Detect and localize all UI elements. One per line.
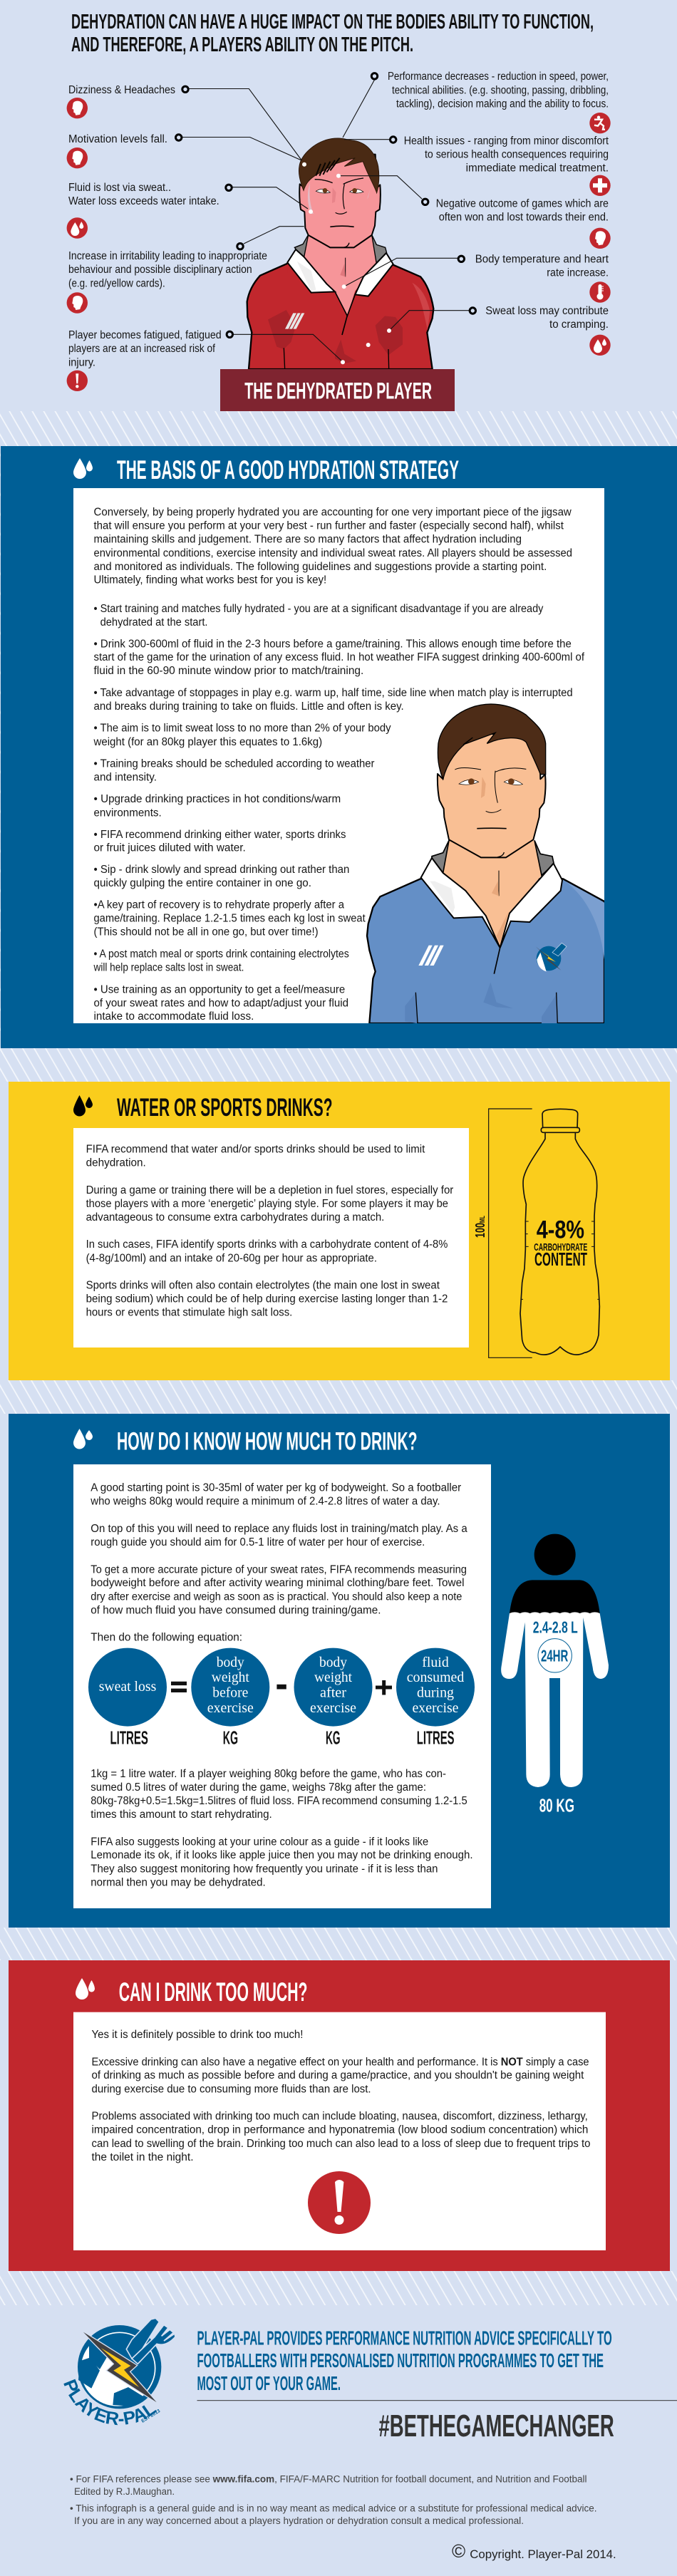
bottle label [534,1216,587,1270]
body text: worked example: normal then you may be dehydrated. [91,1877,266,1889]
heading: CAN I DRINK TOO MUCH? [119,1977,307,2007]
term: body weight after exercise: weight [314,1670,352,1685]
term: sweat loss [88,1648,167,1748]
icon: shirt badge [536,943,567,971]
callout: cramping: to cramping. [549,319,609,331]
white text panel [73,2012,606,2250]
intro text: and monitored as individuals. The following guidelines and suggestions provide a starting point. [94,561,547,573]
figure labels [533,1618,578,1816]
guideline bullets: start of the game for the urination of any excess fluid. In hot weather FIFA suggest drinking 400-600ml of [94,651,585,663]
body text: starting point: of how much fluid you have consumed during training/game. [91,1605,381,1616]
guideline bullets: quickly gulping the entire container in one go. [94,877,311,889]
callout: fatigue: Player becomes fatigued, fatigued [68,329,222,341]
term: fluid consumed during exercise: LITRES [417,1727,455,1748]
callout: fatigue [67,329,222,391]
guideline bullets: will help replace salts lost in sweat. [93,961,244,973]
body text: worked example: times this amount to start rehydrating. [91,1809,272,1821]
bottle label: CARBOHYDRATE [534,1241,587,1253]
callout: fluid lost [67,182,219,239]
callout: fluid lost: Water loss exceeds water intake. [68,195,219,207]
callout: dizziness and headaches [67,84,175,118]
callout: performance decreases: technical abilities. (e.g. shooting, passing, dribbling, [392,84,609,96]
icon: drops [67,217,88,239]
term: fluid consumed during exercise: fluid [422,1655,449,1670]
guideline bullets: •A key part of recovery is to rehydrate properly after a [94,899,344,911]
logo: player-pal [63,2319,175,2426]
body text: starting point [90,1482,467,1643]
body text: Problems associated with drinking too much can include bloating, nausea, discomfort, dizziness, lethargy, [91,2110,588,2122]
illustration: hydrated player [367,704,604,1023]
footnotes [70,2474,597,2526]
callout: performance decreases: tackling), decision making and the ability to focus. [396,98,609,110]
body text: starting point: On top of this you will need to replace any fluids lost in training/match play. As a [91,1523,467,1535]
body text: FIFA recommend that water and/or sports drinks should be used to limit [86,1144,425,1156]
equation: sweat loss [88,1648,475,1748]
guideline bullets: • Drink 300-600ml of fluid in the 2-3 hours before a game/training. This allows enough time before the [94,638,572,650]
guideline bullets: game/training. Replace 1.2-1.5 times each kg lost in sweat [94,912,366,924]
callout: dizziness and headaches: Dizziness & Headaches [68,84,175,96]
guideline bullets: • Upgrade drinking practices in hot conditions/warm [94,793,341,805]
footnotes: • This infograph is a general guide and is in no way meant as medical advice or a substitute for professional medical advice. [70,2503,597,2514]
guideline bullets: • Sip - drink slowly and spread drinking out rather than [94,864,349,876]
guideline bullets: • Take advantage of stoppages in play e.g. warm up, half time, side line when match play is interrupted [94,687,573,699]
guideline bullets: and breaks during training to take on fluids. Little and often is key. [94,700,404,713]
copyright [452,2540,616,2562]
icon: head [67,148,88,168]
body text: starting point: A good starting point is 30-35ml of water per kg of bodyweight. So a footballer [91,1482,461,1494]
footer statement [197,2327,612,2394]
body text [91,2029,590,2163]
body text: Excessive drinking can also have a negative effect on your health and performance. It is NOT simply a case [91,2056,589,2068]
copyright: © [452,2540,465,2562]
term: body weight before exercise: weight [212,1670,249,1685]
heading: WATER OR SPORTS DRINKS? [117,1094,333,1122]
intro text: Conversely, by being properly hydrated you are accounting for one very important piece of the jigsaw [94,506,572,518]
callout: health issues [404,135,611,196]
term: body weight after exercise: after [320,1685,346,1701]
bottle label: CONTENT [534,1250,587,1270]
guideline bullets: • Use training as an opportunity to get a feel/measure [94,983,345,995]
body text: worked example: 80kg-78kg+0.5=1.5kg=1.5litres of fluid loss. FIFA recommend consuming 1.2-1.5 [91,1795,467,1807]
guideline bullets [93,603,585,1023]
body text: can lead to swelling of the brain. Drinking too much can also lead to a loss of sleep due to frequent trips to [91,2138,590,2150]
bottle label: 4-8% [537,1216,584,1243]
callout: fatigue: players are at an increased risk of [68,343,216,355]
term: fluid consumed during exercise: exercise [412,1700,459,1716]
guideline bullets: • A post match meal or sports drink containing electrolytes [94,948,349,960]
illustration: dehydrated player [247,138,433,369]
body text: during exercise due to consuming more fluids than are lost. [91,2083,371,2095]
body text: the toilet in the night. [91,2151,194,2163]
term: body weight before exercise: before [212,1685,248,1701]
body text: starting point: rough guide you should aim for 0.5-1 litre of water per hour of exercise. [91,1536,425,1548]
callout: irritability: behaviour and possible disciplinary action [68,264,252,276]
body text: Sports drinks will often also contain electrolytes (the main one lost in sweat [86,1280,440,1292]
white text panel [73,1464,491,1908]
body text: being sodium) which could be of help during exercise lasting longer than 1-2 [86,1293,448,1305]
body text [86,1144,453,1319]
icon: head [589,228,611,249]
guideline bullets: • Start training and matches fully hydrated - you are at a significant disadvantage if you are already [94,603,544,615]
icon: water drops [73,458,93,479]
body text: hours or events that stimulate high salt loss. [86,1307,292,1319]
body text: During a game or training there will be a depletion in fuel stores, especially for [86,1184,453,1196]
callout: motivation [67,133,167,168]
body text: worked example: They also suggest monitoring how frequently you urinate - if it is less than [91,1863,438,1875]
callout: irritability [67,250,267,314]
footnotes: • For FIFA references please see www.fifa.com, FIFA/F-MARC Nutrition for football document, and Nutrition and Football [70,2474,587,2485]
guideline bullets: environments. [94,807,162,819]
term: body weight after exercise: KG [326,1727,341,1748]
callout: irritability: (e.g. red/yellow cards). [68,278,165,290]
body text: starting point: Then do the following equation: [91,1631,242,1643]
panel: can i drink too much [9,1960,670,2271]
figure labels: 2.4-2.8 L [533,1618,578,1637]
title: dehydration impact [71,11,594,56]
footnotes: If you are in any way concerned about a players hydration or dehydration consult a medical professional. [74,2515,524,2526]
minus sign [277,1685,286,1689]
connector lines and markers [175,73,476,364]
guideline bullets: or fruit juices diluted with water. [94,842,246,854]
callout: motivation: Motivation levels fall. [68,133,167,145]
intro text: environmental conditions, exercise intensity and individual sweat rates. All players should be assessed [94,547,572,559]
callout: health issues: Health issues - ranging from minor discomfort [404,135,609,148]
striped background band [0,411,677,2305]
icon: exclamation [67,371,88,391]
term: fluid consumed during exercise: consumed [407,1670,464,1685]
bottle dimension label: 100ML [473,1216,487,1238]
term: body weight before exercise: KG [223,1727,238,1748]
panel: how much to drink [9,1414,670,1928]
body text: worked example [91,1768,473,1889]
panel: water or sports drinks [9,1082,670,1380]
term: body weight before exercise: body [217,1655,244,1670]
guideline bullets: • Training breaks should be scheduled according to weather [94,758,375,770]
guideline bullets: • FIFA recommend drinking either water, sports drinks [94,829,346,841]
term: body weight after exercise: exercise [310,1700,356,1716]
callout: health issues: immediate medical treatment. [466,162,609,175]
copyright: Copyright. Player-Pal 2014. [470,2547,616,2561]
body text: (4-8g/100ml) and an intake of 20-60g per hour as appropriate. [86,1252,377,1264]
body text: advantageous to consume extra carbohydrates during a match. [86,1211,384,1224]
body text: worked example: Lemonade its ok, if it looks like apple juice then you may not be drinking enough. [91,1849,473,1861]
guideline bullets: • The aim is to limit sweat loss to no more than 2% of your body [94,723,391,734]
body text: those players with a more ‘energetic’ playing style. For some players it may be [86,1198,448,1210]
logo: player-pal: EST 2013 [140,2409,161,2424]
intro text [94,506,572,586]
icon: drops [589,335,611,356]
footnotes: Edited by R.J.Maughan. [74,2486,175,2497]
title: dehydration impact: AND THEREFORE, A PLAYERS ABILITY ON THE PITCH. [71,33,413,56]
logo: player-pal: PLAYER-PAL [63,2379,157,2426]
body text: starting point: To get a more accurate picture of your sweat rates, FIFA recommends measuring [91,1563,467,1576]
term: body weight before exercise [191,1648,269,1748]
term: fluid consumed during exercise [396,1648,475,1748]
term: body weight after exercise [294,1648,372,1748]
heading: HOW DO I KNOW HOW MUCH TO DRINK? [117,1427,418,1455]
illustration: human figure water content [501,1534,609,1787]
guideline bullets: intake to accommodate fluid loss. [94,1010,254,1023]
body text: dehydration. [86,1157,146,1169]
guideline bullets: (This should not be all in one go, but over time!) [94,926,319,938]
body text: impaired concentration, drop in performance and hyponatremia (low blood sodium concentration) which [91,2124,588,2136]
intro text: maintaining skills and judgement. There are so many factors that affect hydration including [94,533,522,545]
banner: the dehydrated player: THE DEHYDRATED PLAYER [244,378,432,403]
term: fluid consumed during exercise: during [417,1685,454,1701]
body text: Yes it is definitely possible to drink too much! [91,2029,303,2041]
body text: In such cases, FIFA identify sports drinks with a carbohydrate content of 4-8% [86,1238,448,1251]
white text panel [73,1128,469,1348]
callout: negative outcome: often won and lost towards their end. [439,211,609,223]
plus sign [376,1680,392,1695]
guideline bullets: of your sweat rates and how to adapt/adjust your fluid [94,997,348,1009]
callout: fatigue: injury. [68,356,95,368]
guideline bullets: dehydrated at the start. [100,616,208,629]
icon: thermometer [589,281,611,303]
callout: negative outcome: Negative outcome of games which are [436,197,609,210]
callout: negative outcome [436,197,611,249]
icon: warning exclamation [308,2171,371,2234]
white text panel [73,488,604,1023]
intro text: that will ensure you perform at your very best - run further and faster (especially second half), whilst [94,519,564,532]
callout: performance decreases: Performance decreases - reduction in speed, power, [388,71,609,83]
figure labels: 80 KG [539,1796,574,1816]
term: sweat loss: LITRES [110,1727,148,1748]
intro text: Ultimately, finding what works best for you is key! [94,574,326,586]
callout: body temperature: Body temperature and heart [475,254,609,266]
callout: body temperature: rate increase. [547,267,609,279]
guideline bullets: fluid in the 60-90 minute window prior to match/training. [94,665,363,677]
callout: fluid lost: Fluid is lost via sweat.. [68,182,171,194]
callout: cramping [485,305,611,356]
icon: head [67,292,88,314]
guideline bullets: and intensity. [94,771,157,783]
body text: of drinking as much as possible before and during a game/practice, and you shouldn't be gaining weight [91,2069,584,2081]
term: sweat loss: sweat loss [99,1679,157,1695]
term: body weight after exercise: body [319,1655,347,1670]
body text: starting point: who weighs 80kg would require a minimum of 2.4-2.8 litres of water a day. [90,1496,440,1508]
callout: irritability: Increase in irritability leading to inappropriate [68,250,267,262]
icon: water drops [73,1095,93,1116]
icon: water drops [76,1978,95,2000]
figure labels: 24HR [541,1647,569,1665]
banner: the dehydrated player [220,369,455,411]
callout: performance decreases [388,71,611,133]
callout: cramping: Sweat loss may contribute [485,305,609,317]
body text: starting point: bodyweight before and after activity wearing minimal clothing/bare feet. Towel [91,1577,465,1589]
equals sign [171,1682,187,1692]
body text: worked example: sumed 0.5 litres of water during the game, weighs 78kg after the game: [91,1781,426,1794]
panel: basis of a good hydration strategy [1,446,677,1048]
icon: medical cross [589,175,611,196]
icon: water drops [73,1429,93,1449]
guideline bullets: weight (for an 80kg player this equates to 1.6kg) [93,736,322,748]
term: body weight before exercise: exercise [207,1700,254,1716]
icon: runner [589,113,611,133]
callout: body temperature [475,254,611,303]
callout: health issues: to serious health consequences requiring [425,149,609,161]
body text: starting point: dry after exercise and weigh as soon as is practical. You should also keep a note [91,1590,462,1603]
body text: worked example: 1kg = 1 litre water. If a player weighing 80kg before the game, who has con- [91,1768,446,1780]
body text: worked example: FIFA also suggests looking at your urine colour as a guide - if it looks like [91,1836,428,1848]
illustration: bottle [489,1109,599,1357]
icon: head [67,98,88,118]
footer statement: MOST OUT OF YOUR GAME. [197,2372,341,2394]
